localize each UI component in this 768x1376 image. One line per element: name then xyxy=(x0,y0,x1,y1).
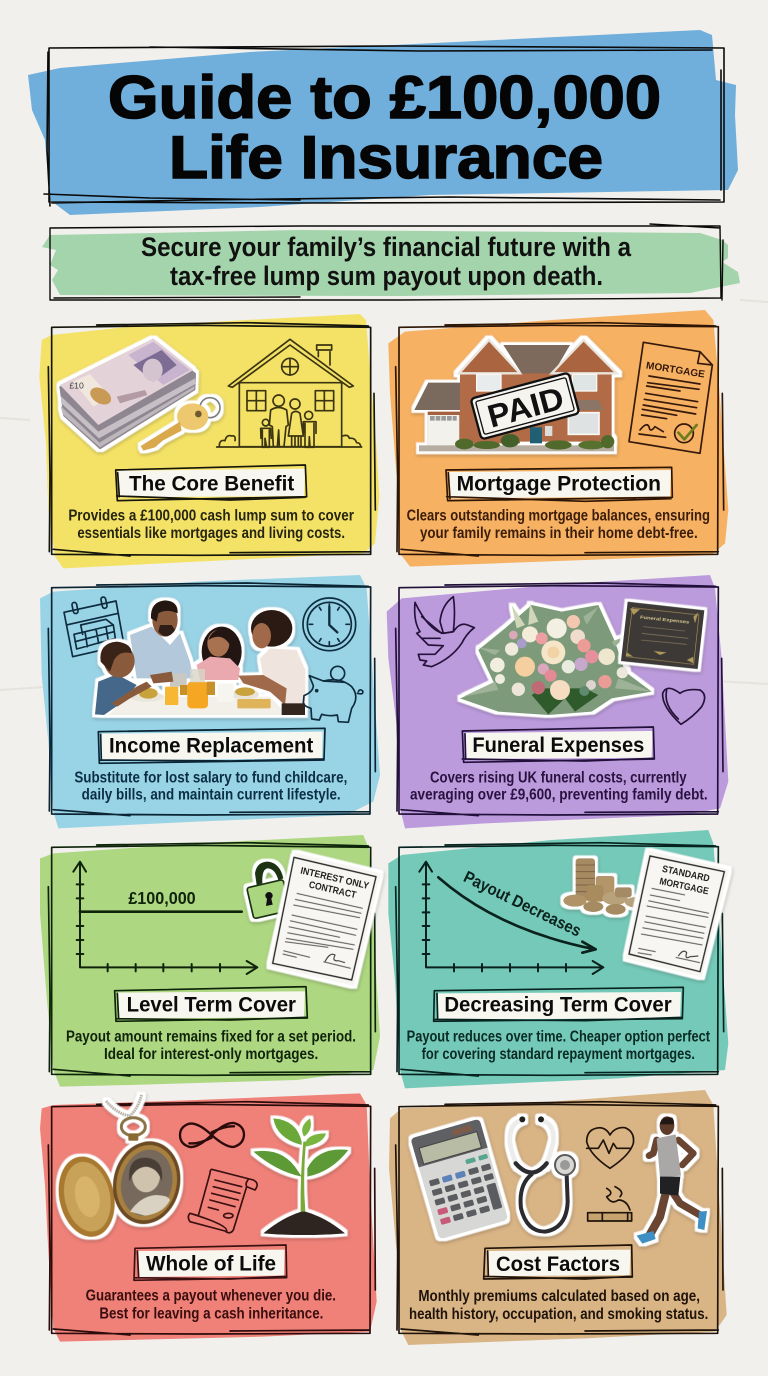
label: the core benefit xyxy=(116,465,307,501)
text: income description xyxy=(74,769,347,804)
text: income description: Substitute for lost salary to fund childcare, xyxy=(74,769,347,786)
icon: heartbeat heart xyxy=(587,1128,634,1168)
text: whole of life description xyxy=(86,1287,336,1322)
panel: cost factors xyxy=(389,1090,727,1345)
panel: level term cover xyxy=(40,835,381,1087)
text: cost factors description xyxy=(409,1288,708,1323)
label: level term cover xyxy=(115,987,307,1021)
chart: level payout line xyxy=(73,862,257,974)
image: funeral expenses plaque xyxy=(621,602,704,669)
label: decreasing term cover xyxy=(434,987,683,1021)
image: interest only contract xyxy=(269,853,381,986)
title text: Guide to £100,000 xyxy=(108,64,661,131)
image: gold key xyxy=(141,398,220,451)
label: decreasing term cover: Decreasing Term Cover xyxy=(444,993,672,1017)
image: gold locket with portrait xyxy=(51,1094,188,1242)
panel: funeral expenses xyxy=(387,575,728,828)
icon: calendar xyxy=(64,597,124,657)
image: house with PAID stamp xyxy=(414,340,617,451)
label: funeral expenses: Funeral Expenses xyxy=(472,733,644,757)
chart: decreasing payout curve xyxy=(419,862,603,974)
icon: heart xyxy=(663,688,705,724)
image: banknote stack xyxy=(59,338,196,449)
panel: mortgage protection: PAID xyxy=(484,380,568,435)
text: mortgage description xyxy=(407,508,710,542)
label: cost factors xyxy=(484,1245,632,1279)
title banner xyxy=(28,30,738,215)
label: mortgage protection: Mortgage Protection xyxy=(457,471,661,495)
label: whole of life xyxy=(134,1245,287,1280)
text: funeral description: Covers rising UK funeral costs, currently xyxy=(430,769,687,786)
icon: house with family xyxy=(217,339,362,447)
subtitle banner xyxy=(42,224,740,300)
image: standard mortgage document: MORTGAGE xyxy=(658,876,710,897)
text: income description: daily bills, and maintain current lifestyle. xyxy=(82,787,341,804)
label: cost factors: Cost Factors xyxy=(496,1252,620,1276)
text: level term description: Payout amount remains fixed for a set period. xyxy=(66,1028,356,1045)
icon: piggy bank xyxy=(303,666,363,722)
label: level term cover: Level Term Cover xyxy=(127,993,296,1017)
text: decreasing term description xyxy=(407,1028,710,1063)
image: green seedling xyxy=(253,1118,348,1235)
text: mortgage description: Clears outstanding mortgage balances, ensuring xyxy=(407,508,710,525)
label: whole of life: Whole of Life xyxy=(146,1252,276,1276)
panel: income replacement xyxy=(40,575,380,828)
icon: padlock xyxy=(247,862,290,919)
text: funeral description xyxy=(410,769,708,804)
text: core benefit description: Provides a £100,000 cash lump sum to cover xyxy=(68,508,354,525)
icon: infinity xyxy=(180,1123,244,1147)
text: decreasing term description: Payout reduces over time. Cheaper option perfect xyxy=(407,1028,710,1045)
text: whole of life description: Best for leaving a cash inheritance. xyxy=(99,1305,323,1322)
text: funeral description: averaging over £9,600, preventing family debt. xyxy=(410,787,708,804)
text: level term description: Ideal for interest-only mortgages. xyxy=(104,1046,318,1063)
text: core benefit description: essentials like mortgages and living costs. xyxy=(77,525,345,542)
icon: clock xyxy=(303,598,356,651)
image: family at breakfast table xyxy=(95,600,305,715)
text: whole of life description: Guarantees a payout whenever you die. xyxy=(86,1287,336,1304)
chart: decreasing payout curve: Payout Decreases xyxy=(461,867,584,941)
panel: the core benefit xyxy=(39,314,379,568)
image: banknote stack: £10 xyxy=(69,380,84,390)
image: coin stacks xyxy=(563,858,648,915)
image: funeral flowers xyxy=(460,603,652,715)
label: the core benefit: The Core Benefit xyxy=(129,471,294,495)
subtitle text: Secure your family’s financial future with a xyxy=(141,232,632,262)
text: cost factors description: Monthly premiums calculated based on age, xyxy=(418,1288,700,1305)
image: funeral expenses plaque: Funeral Expenses xyxy=(640,614,690,625)
icon: cigarette xyxy=(588,1187,632,1221)
text: level term description xyxy=(66,1028,356,1063)
image: interest only contract: CONTRACT xyxy=(308,880,357,901)
image: jogger xyxy=(637,1116,707,1244)
text: cost factors description: health history, occupation, and smoking status. xyxy=(409,1306,708,1323)
title banner: Life Insurance xyxy=(169,124,603,191)
icon: scroll xyxy=(188,1169,257,1233)
text: mortgage description: your family remains in their home debt-free. xyxy=(420,525,698,542)
label: mortgage protection xyxy=(446,467,672,501)
label: income replacement: Income Replacement xyxy=(109,734,313,758)
image: calculator xyxy=(410,1119,508,1239)
text: core benefit description xyxy=(68,508,354,542)
image: standard mortgage document: STANDARD xyxy=(661,864,711,885)
text: decreasing term description: for covering standard repayment mortgages. xyxy=(422,1046,695,1063)
image: stethoscope xyxy=(510,1116,575,1232)
icon: mortgage document xyxy=(629,342,712,453)
panel: decreasing term cover xyxy=(388,830,729,1088)
label: income replacement xyxy=(98,728,325,763)
panel: whole of life xyxy=(40,1093,377,1342)
image: interest only contract: INTEREST ONLY xyxy=(299,866,370,892)
panel: mortgage protection xyxy=(388,310,728,567)
icon: mortgage document: MORTGAGE xyxy=(645,360,706,381)
image: standard mortgage document xyxy=(626,851,729,977)
chart: level payout line: £100,000 xyxy=(128,888,196,908)
label: funeral expenses xyxy=(462,727,654,762)
subtitle banner: tax-free lump sum payout upon death. xyxy=(170,261,603,291)
icon: dove xyxy=(415,597,474,667)
